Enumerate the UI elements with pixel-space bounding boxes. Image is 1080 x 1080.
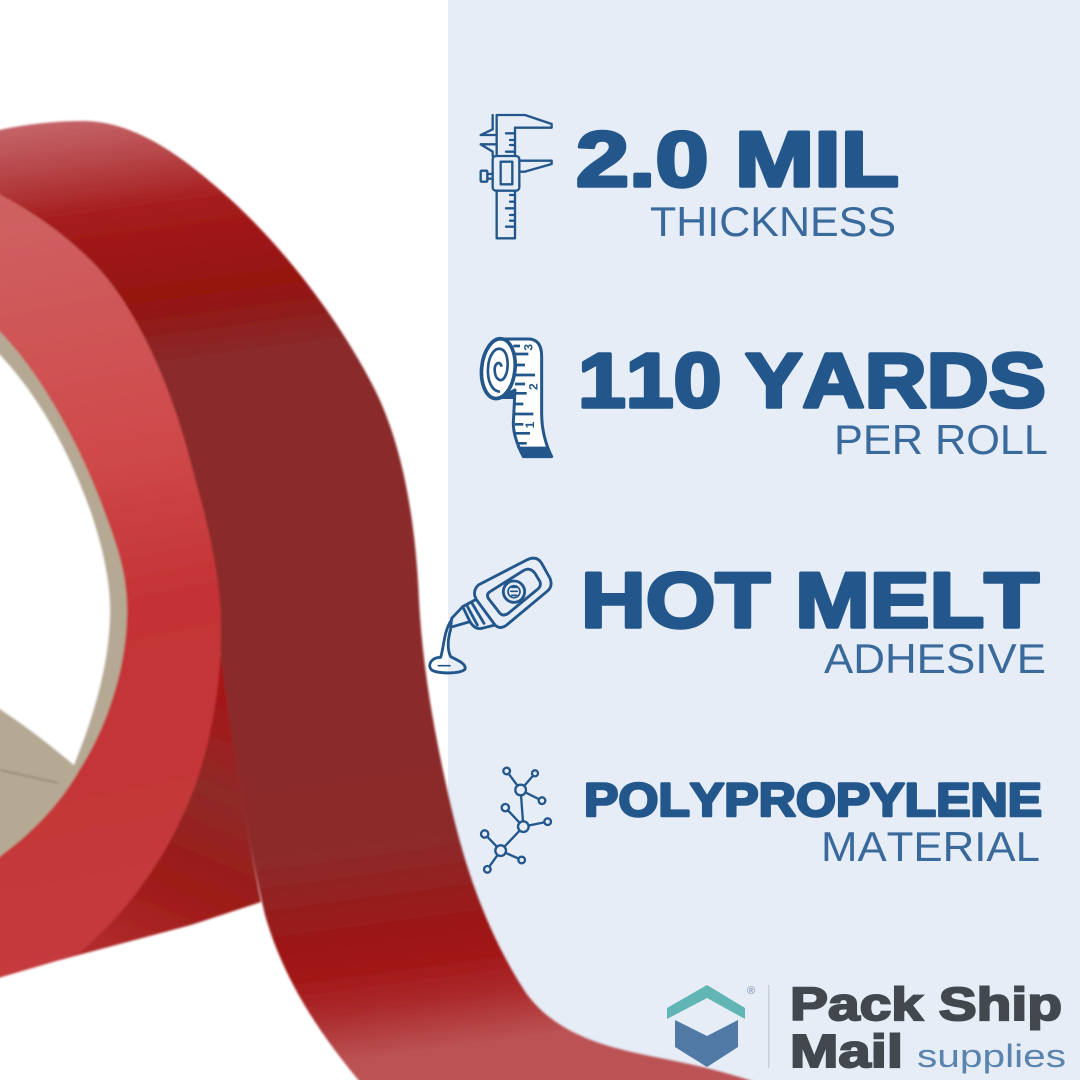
icon: glue bottle	[430, 558, 551, 673]
tick marks	[513, 346, 535, 443]
logo icon box	[675, 1020, 738, 1067]
label: ADHESIVE: ADHESIVE	[824, 635, 1046, 682]
heading: 110 YARDS: 110 YARDS	[578, 338, 1046, 424]
registered mark: ®	[747, 985, 755, 997]
roll shadow	[498, 389, 515, 399]
heading: 2.0 MIL: 2.0 MIL	[576, 115, 899, 203]
icon: molecule	[481, 768, 551, 873]
icon: tape measure	[479, 337, 552, 457]
tape outer band and unrolled ribbon	[0, 121, 755, 1080]
logo: Pack Ship Mail supplies	[667, 978, 1066, 1077]
heading: HOT MELT: HOT MELT	[581, 556, 1039, 644]
label: THICKNESS: THICKNESS	[650, 198, 896, 245]
background: left white area	[0, 0, 448, 1080]
logo wordmark second line: Mail	[790, 1025, 903, 1077]
tape numbers: 3	[522, 344, 536, 351]
background: right pale blue panel	[448, 0, 1080, 1080]
logo icon roof	[667, 985, 745, 1019]
logo supplies: supplies	[917, 1038, 1066, 1074]
cardboard core	[0, 327, 127, 860]
inner core wall line	[0, 770, 58, 783]
tape measure ribbon	[498, 339, 552, 457]
tape numbers	[522, 344, 540, 428]
tape roll front face	[0, 192, 221, 979]
logo wordmark: Pack Ship	[790, 978, 1062, 1030]
heading: POLYPROPYLENE: POLYPROPYLENE	[584, 773, 1042, 826]
tape roll underside	[60, 630, 261, 960]
tape numbers: 1	[523, 421, 537, 428]
tape roll photo illustration	[0, 121, 755, 1080]
label: MATERIAL: MATERIAL	[821, 823, 1040, 870]
icon: caliper	[481, 115, 552, 238]
tape measure base band	[517, 447, 552, 457]
core centre hole	[0, 350, 110, 765]
roll spiral	[479, 337, 518, 400]
label: PER ROLL: PER ROLL	[834, 416, 1048, 463]
tape numbers: 2	[526, 383, 540, 390]
